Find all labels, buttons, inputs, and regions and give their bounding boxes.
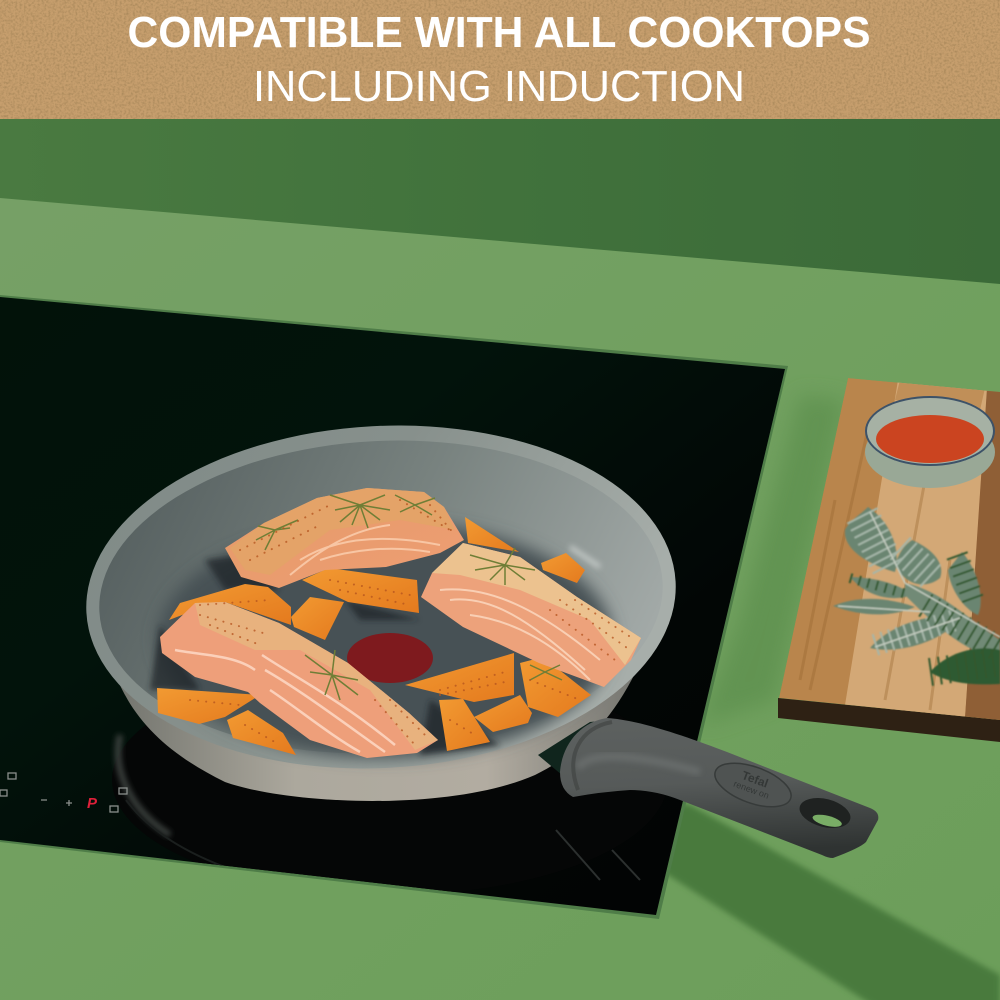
induction hob <box>0 295 788 919</box>
hob controls <box>0 773 127 812</box>
frying pan <box>77 411 878 858</box>
handle logo <box>709 754 797 816</box>
shadow beside the cutting board <box>700 395 845 725</box>
sweet potatoes <box>157 517 591 755</box>
dill garnish <box>256 495 562 700</box>
handle hole <box>796 793 854 833</box>
handle logo: renew on <box>732 779 770 801</box>
bowl of paprika <box>865 396 995 488</box>
hob controls: P <box>87 795 98 812</box>
cast shadow of the handle <box>660 800 1000 1000</box>
pan floor <box>157 522 613 758</box>
rosemary herbs <box>833 507 1000 684</box>
thermo spot <box>347 633 433 683</box>
salmon fillets <box>160 488 641 758</box>
burner ring <box>112 725 640 892</box>
salmon right <box>421 543 641 687</box>
pan rim <box>77 411 685 783</box>
header banner <box>0 0 1000 119</box>
cutting board <box>778 378 1000 742</box>
pan wall highlight <box>570 547 600 567</box>
pan handle <box>538 718 878 858</box>
salmon left <box>160 602 438 758</box>
pan inner wall <box>91 426 671 768</box>
handle logo: Tefal <box>740 768 770 791</box>
spice speckle <box>190 500 635 745</box>
food shadows <box>150 555 500 755</box>
subtitle: INCLUDING INDUCTION <box>253 62 745 111</box>
green wall <box>0 118 1000 288</box>
pan outer wall <box>105 640 650 801</box>
salmon top <box>225 488 464 588</box>
title: COMPATIBLE WITH ALL COOKTOPS <box>128 8 870 57</box>
